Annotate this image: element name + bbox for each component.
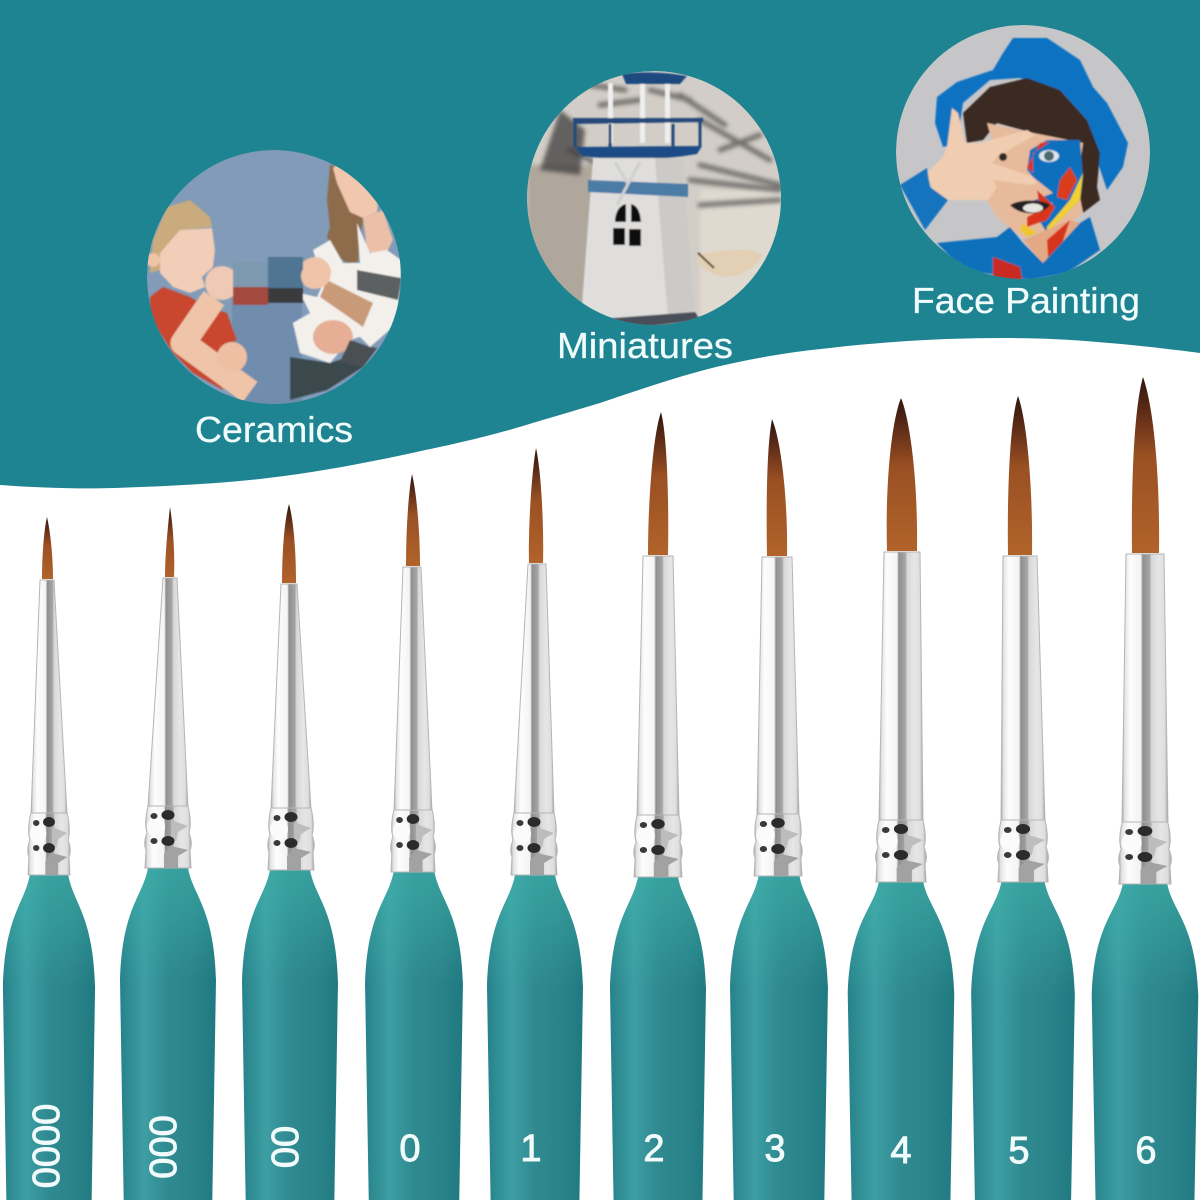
label: ceramics: Ceramics: [195, 409, 353, 450]
size number 5: 5: [1008, 1130, 1030, 1172]
size number 000: 000: [141, 1115, 183, 1179]
brush: size 0: [365, 474, 463, 1200]
photo circle: face painting: [896, 25, 1150, 285]
brush: size 000: [120, 507, 216, 1200]
size number 0: 0: [399, 1128, 421, 1170]
size number 2: 2: [643, 1128, 665, 1170]
photo circle: miniatures: [527, 71, 785, 330]
size number 0000: 0000: [24, 1104, 66, 1188]
label: miniatures: Miniatures: [557, 325, 733, 366]
brush: size 0000: [3, 517, 95, 1200]
size number 1: 1: [520, 1128, 542, 1170]
size number 6: 6: [1135, 1130, 1157, 1172]
teal wave header: [0, 0, 1200, 488]
size number 4: 4: [890, 1130, 912, 1172]
size number 00: 00: [263, 1126, 305, 1168]
brush: size 3: [730, 419, 828, 1200]
brush: size 2: [610, 412, 706, 1200]
brush: size 4: [848, 398, 954, 1200]
brush: size 5: [971, 396, 1075, 1200]
size number 3: 3: [764, 1128, 786, 1170]
brush: size 6: [1092, 377, 1198, 1200]
brush: size 00: [242, 504, 338, 1200]
brush: size 1: [487, 448, 583, 1200]
label: face painting: Face Painting: [912, 280, 1140, 321]
photo circle: ceramics: [146, 150, 401, 410]
